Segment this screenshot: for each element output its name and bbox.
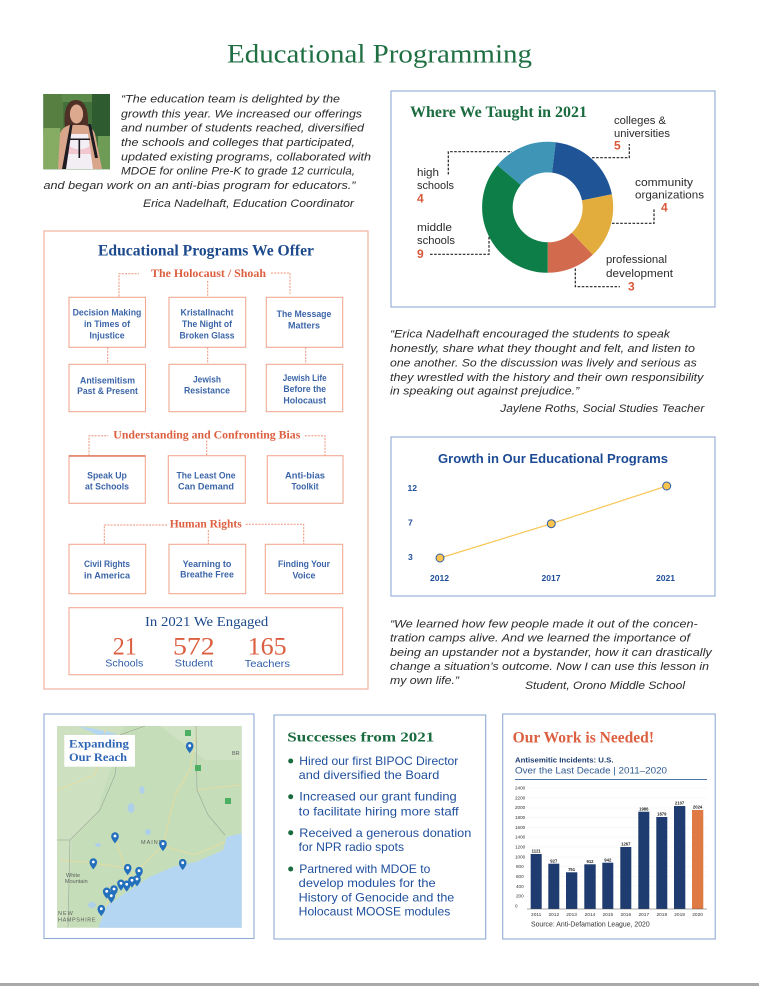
bar chart: 2400: [515, 786, 526, 790]
bar chart: 1000: [515, 854, 526, 859]
label: high schools: 4: [417, 192, 424, 206]
quote: education coordinator: Erica Nadelhaft, Education Coordinator: [143, 198, 355, 210]
quote: student: being an upstander not a bystander, how it can drastically: [390, 647, 713, 659]
quote: social studies teacher: “Erica Nadelhaft encouraged the students to speak: [390, 329, 671, 341]
stats: in 2021 we engaged: In 2021 We Engaged: [145, 614, 269, 629]
panel: expanding our reach map: [44, 714, 254, 938]
bar chart: [515, 786, 707, 918]
stats: in 2021 we engaged: Teachers: [245, 659, 290, 670]
section: understanding bias: Toolkit: [292, 480, 318, 491]
bar chart: 2200: [515, 795, 526, 800]
label: middle schools: [417, 222, 489, 261]
label: community organizations: 4: [661, 200, 668, 214]
stats: in 2021 we engaged: [69, 608, 343, 675]
label: colleges and universities: 5: [614, 138, 621, 152]
section: the holocaust: Jewish Life: [283, 372, 327, 383]
heading: growth: Growth in Our Educational Programs: [438, 451, 668, 466]
bar chart: 800: [516, 864, 524, 869]
quote: education coordinator: and number of students reached, diversified: [121, 123, 365, 135]
section: the holocaust: Injustice: [90, 329, 124, 340]
label: professional development: 3: [628, 280, 635, 294]
heading: our work is needed: Our Work is Needed!: [513, 729, 654, 746]
section: human rights: Voice: [292, 569, 316, 580]
line chart: 2017: [541, 573, 561, 583]
section: human rights: in America: [84, 569, 131, 580]
label: community organizations: [612, 177, 705, 223]
bullet list: Hired our first BIPOC Director: [299, 755, 458, 768]
label: middle schools: schools: [417, 235, 456, 247]
label: high schools: [417, 152, 512, 206]
line chart: 2021: [656, 573, 675, 583]
bar chart: 2024: [693, 805, 703, 810]
map: NEW: [58, 911, 74, 917]
quote: social studies teacher: Jaylene Roths, Social Studies Teacher: [499, 403, 706, 415]
bar chart: 2000: [515, 805, 526, 810]
bar chart: 1600: [515, 825, 526, 830]
section: human rights: Finding Your: [278, 558, 330, 569]
bullet list: History of Genocide and the: [299, 892, 454, 905]
heading: programs we offer: Educational Programs We Offer: [98, 242, 314, 260]
bar chart: 400: [516, 884, 524, 889]
bar chart: 2012: [548, 912, 559, 918]
photo: Erica Nadelhaft: [43, 94, 110, 169]
bar chart: 2016: [620, 912, 631, 918]
stats: in 2021 we engaged: 21: [113, 631, 137, 660]
bullet list: to facilitate hiring more staff: [299, 805, 460, 818]
bullet list: Partnered with MDOE to: [299, 863, 430, 876]
section: human rights: Breathe Free: [180, 569, 234, 580]
heading: where we taught: Where We Taught in 2021: [410, 104, 587, 121]
section: the holocaust: The Holocaust / Shoah: [151, 266, 266, 280]
panel: our work is needed: [503, 714, 715, 939]
panel: where we taught: [391, 91, 715, 307]
chart titles: Over the Last Decade | 2011–2020: [515, 765, 667, 776]
quote: student: my own life.”: [390, 675, 460, 687]
quote: student: change a situation’s outcome. Now I can use this lesson in: [390, 661, 709, 673]
section: the holocaust: Before the: [283, 383, 326, 394]
label: high schools: high: [417, 167, 439, 179]
map label: [64, 735, 135, 767]
section: human rights: [69, 516, 343, 594]
bar chart: 2107: [675, 801, 685, 806]
bar chart: 2018: [656, 912, 667, 918]
quote: student: tration camps alive. And we learned the importance of: [390, 633, 692, 645]
quote: education coordinator: growth this year. We increased our offerings: [121, 108, 362, 120]
quote: social studies teacher: they wrestled with the history and their own responsibility: [390, 372, 705, 384]
bar chart: 1879: [657, 812, 667, 817]
section: human rights: Civil Rights: [84, 558, 130, 569]
quote: student: Student, Orono Middle School: [525, 680, 686, 692]
map: [57, 726, 242, 928]
line chart: [408, 482, 675, 583]
bullet list: Increased our grant funding: [299, 791, 457, 804]
section: human rights: Yearning to: [183, 558, 232, 569]
line chart: 7: [408, 518, 413, 528]
section: understanding bias: Speak Up: [87, 469, 127, 480]
section: the holocaust: Past & Present: [77, 385, 138, 396]
bar chart: 1986: [639, 806, 649, 811]
bar chart: 2013: [566, 912, 577, 918]
quote: social studies teacher: honestly, share what they thought and felt, and listen to: [390, 343, 695, 355]
panel: growth line chart: [391, 437, 715, 596]
stats: in 2021 we engaged: 572: [173, 631, 215, 660]
quote: education coordinator: [44, 94, 371, 210]
bar chart: 942: [604, 857, 612, 862]
bar chart: 912: [586, 859, 594, 864]
bullet list: and diversified the Board: [299, 769, 439, 782]
stats: in 2021 we engaged: Student: [175, 659, 213, 670]
label: professional development: development: [606, 268, 673, 280]
label: middle schools: middle: [417, 222, 452, 234]
bar chart: 1267: [621, 842, 631, 847]
section: the holocaust: Antisemitism: [80, 374, 135, 385]
bar chart: 2017: [638, 912, 649, 918]
map pins: [90, 742, 194, 916]
section: the holocaust: Resistance: [184, 385, 230, 396]
bar chart: 2011: [531, 912, 542, 918]
panel: successes from 2021: [274, 715, 486, 939]
map: BR: [232, 751, 240, 757]
section: the holocaust: in Times of: [84, 318, 131, 329]
section: the holocaust: The Message: [277, 308, 331, 319]
stats: in 2021 we engaged: 165: [248, 631, 287, 660]
bar chart: 1200: [515, 844, 526, 850]
source note: Source: Anti-Defamation League, 2020: [531, 919, 650, 928]
bullet list: [288, 755, 471, 919]
section: understanding bias: Anti-bias: [285, 469, 325, 480]
label: community organizations: community: [635, 177, 694, 189]
quote: education coordinator: the schools and colleges that participated,: [121, 137, 355, 149]
section: understanding bias: The Least One: [176, 469, 236, 480]
label: colleges and universities: colleges &: [614, 115, 667, 127]
bar chart: 1800: [515, 815, 526, 820]
heading: successes: Successes from 2021: [287, 731, 434, 746]
donut chart: [482, 142, 613, 273]
section: the holocaust: Kristallnacht: [180, 307, 234, 318]
label: community organizations: organizations: [635, 190, 705, 202]
section: understanding bias: Can Demand: [178, 480, 234, 491]
quote: social studies teacher: [390, 329, 706, 415]
quote: student: “We learned how few people made it out of the concen-: [390, 618, 698, 630]
section: the holocaust: Decision Making: [73, 307, 142, 318]
line chart: 3: [408, 552, 413, 562]
bar chart: 2014: [585, 912, 596, 918]
quote: education coordinator: “The education team is delighted by the: [121, 94, 340, 106]
map: MAINE: [141, 840, 163, 846]
label: high schools: schools: [417, 180, 454, 192]
label: professional development: professional: [606, 254, 667, 266]
section: understanding bias: at Schools: [85, 480, 129, 491]
map label: Our Reach: [69, 750, 127, 764]
bullet list: for NPR radio spots: [299, 841, 404, 854]
chart titles: [515, 756, 707, 780]
map: Mountain: [65, 879, 88, 885]
label: professional development: [575, 254, 673, 294]
line chart: 12: [408, 483, 417, 493]
section: the holocaust: Jewish: [193, 373, 221, 384]
section: the holocaust: Broken Glass: [180, 329, 234, 340]
quote: education coordinator: MDOE for online Pre-K to grade 12 curricula,: [121, 165, 355, 177]
section: the holocaust: The Night of: [182, 318, 233, 329]
bar chart: 2015: [602, 912, 613, 918]
bar chart: 600: [516, 874, 524, 879]
chart titles: Antisemitic Incidents: U.S.: [515, 756, 614, 765]
section: understanding bias: [69, 428, 343, 503]
label: middle schools: 9: [417, 247, 424, 261]
map label: Expanding: [69, 736, 129, 750]
section: the holocaust: Holocaust: [283, 394, 326, 405]
map: White: [66, 873, 80, 879]
map: HAMPSHIRE: [58, 918, 96, 924]
bar chart: 2019: [674, 912, 685, 918]
panel: educational programs: [44, 231, 368, 689]
quote: social studies teacher: one another. So the discussion was lively and serious as: [390, 357, 697, 369]
section: human rights: Human Rights: [170, 516, 242, 530]
bar chart: 200: [516, 894, 524, 899]
stats: in 2021 we engaged: Schools: [105, 659, 143, 670]
bar chart: 1400: [515, 835, 526, 840]
quote: education coordinator: updated existing programs, collaborated with: [121, 152, 371, 164]
bullet list: Holocaust MOOSE modules: [299, 906, 451, 919]
title: Educational Programming: [227, 38, 532, 68]
bar chart: 751: [568, 867, 576, 872]
quote: social studies teacher: in speaking out against prejudice.”: [390, 386, 581, 398]
section: the holocaust: [69, 266, 343, 412]
section: understanding bias: Understanding and Confronting Bias: [113, 428, 301, 442]
section: the holocaust: Matters: [288, 320, 320, 331]
label: colleges and universities: universities: [614, 128, 670, 140]
footer bar: [0, 983, 759, 986]
bar chart: 0: [515, 903, 518, 908]
bullet list: Received a generous donation: [299, 827, 471, 840]
bar chart: 1121: [532, 849, 541, 854]
quote: education coordinator: and began work on an anti-bias program for educators.”: [44, 180, 357, 192]
quote: student: [390, 618, 713, 692]
line chart: 2012: [430, 573, 449, 583]
bullet list: develop modules for the: [299, 877, 436, 890]
bar chart: 2020: [692, 912, 703, 918]
label: colleges and universities: [592, 115, 670, 158]
bar chart: 927: [550, 858, 558, 863]
